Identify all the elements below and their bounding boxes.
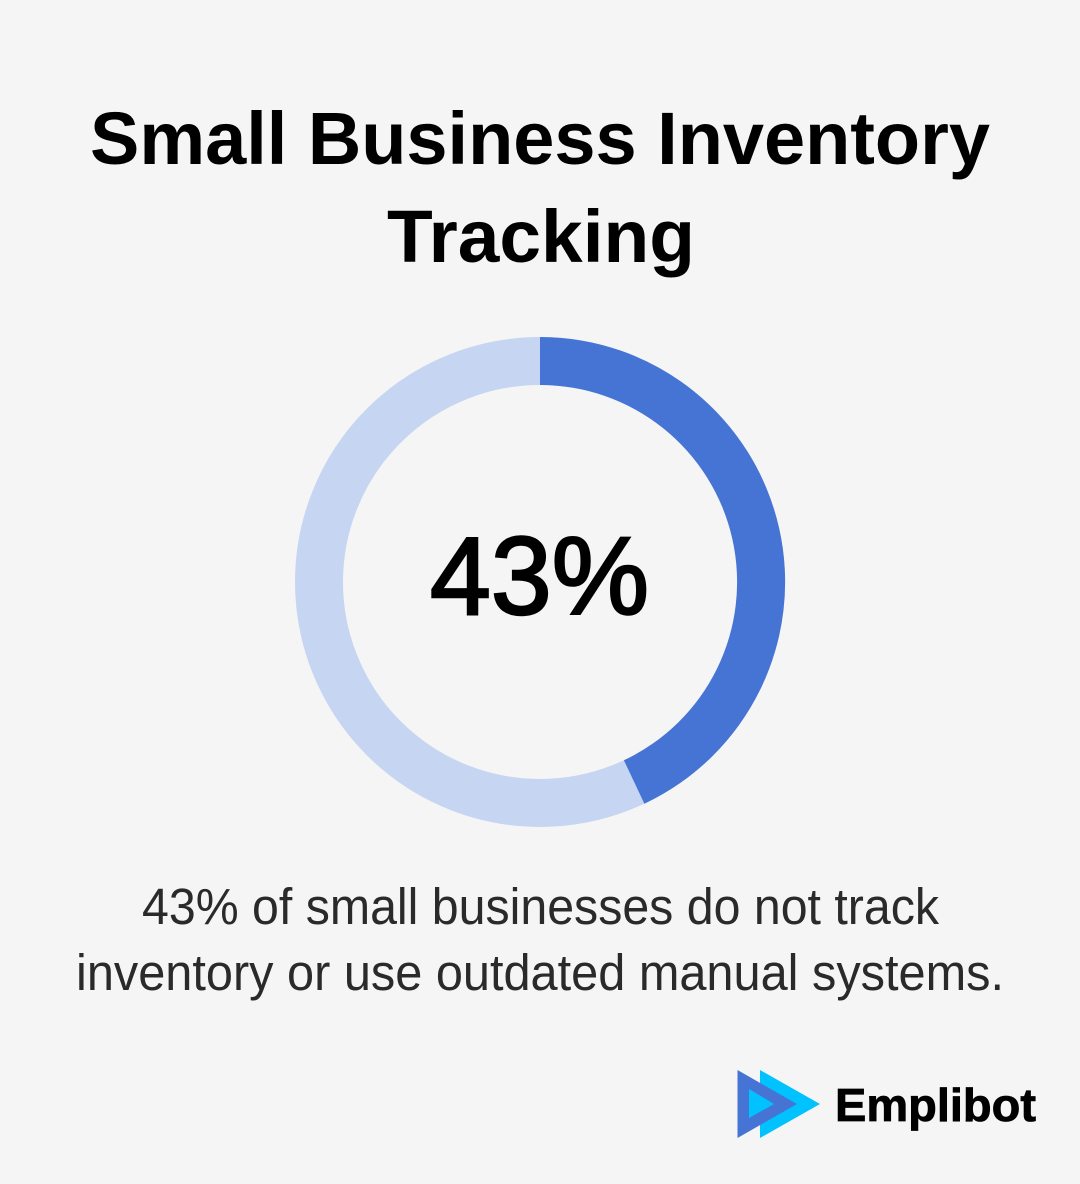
title: Tracking	[387, 195, 695, 278]
donut track: remaining share	[319, 361, 761, 803]
description text	[76, 878, 1004, 1001]
title	[90, 97, 990, 278]
logo wordmark: Emplibot	[835, 1079, 1036, 1131]
logo: Emplibot	[738, 1070, 1036, 1138]
donut chart: 43 percent	[319, 337, 785, 804]
description text: inventory or use outdated manual systems.	[76, 944, 1004, 1001]
donut segment: 43 percent	[540, 337, 785, 804]
center value: 43%	[430, 515, 649, 638]
title: Small Business Inventory	[90, 97, 990, 180]
description text: 43% of small businesses do not track	[142, 878, 939, 935]
icon: play triangles	[738, 1070, 820, 1138]
